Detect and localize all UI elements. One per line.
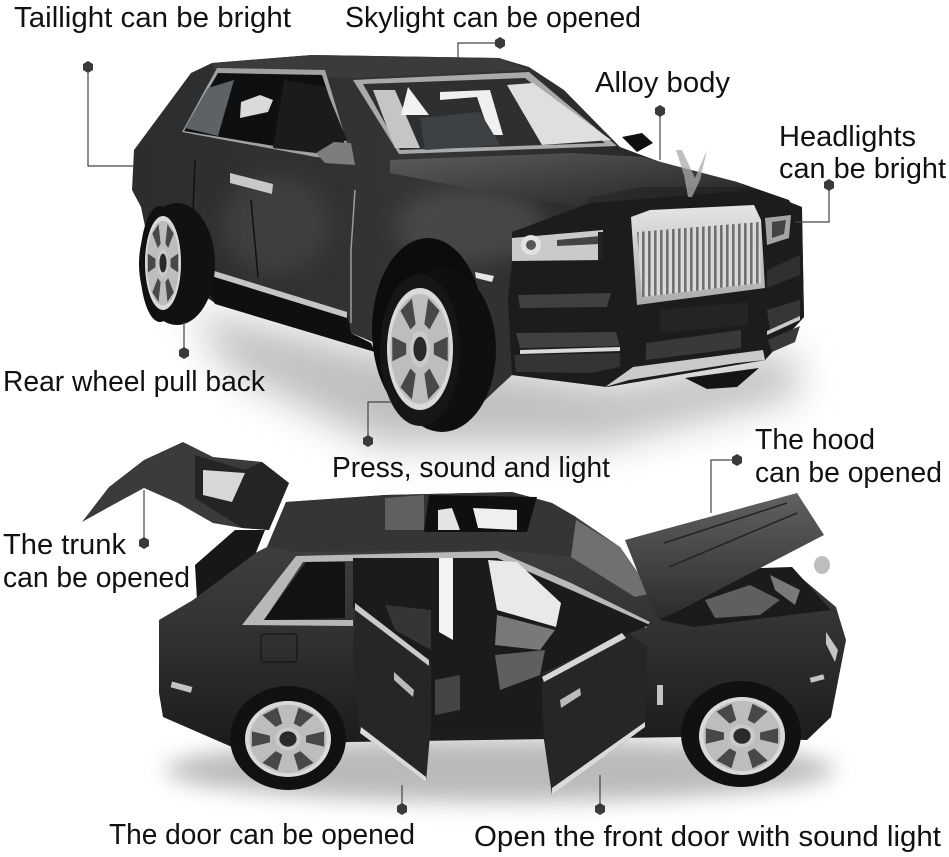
fuel flap — [261, 634, 297, 662]
chrome window surround — [242, 551, 650, 628]
top car: Rolls-Royce Cullinan model, front three-quarter view — [132, 55, 804, 432]
label: trunk: The trunk — [3, 529, 127, 561]
label: trunk — [3, 529, 190, 594]
rear side highlight — [220, 175, 330, 275]
rear opening under tailgate — [195, 530, 265, 600]
side windows — [182, 68, 352, 160]
chrome sill strip — [195, 265, 347, 318]
front wheel — [681, 681, 801, 787]
label: headlights: can be bright — [779, 153, 946, 185]
door seams — [191, 160, 258, 277]
lower bumper vents — [514, 255, 800, 387]
silver hood ornament — [676, 150, 707, 197]
rear wheel — [230, 686, 346, 790]
front wheel arch — [372, 238, 484, 422]
engine bay — [660, 567, 831, 627]
label: trunk: can be opened — [3, 562, 190, 594]
windshield — [571, 520, 652, 597]
label: hood: The hood — [755, 424, 875, 456]
label: skylight: Skylight can be opened — [345, 2, 641, 34]
label: door: The door can be opened — [109, 819, 415, 851]
bottom car: model with doors, trunk and hood open — [82, 442, 846, 795]
front grille — [631, 205, 765, 305]
open rear door — [353, 603, 431, 782]
open hood — [625, 493, 824, 620]
far front wheel — [685, 368, 759, 389]
rear lamp and side markers — [171, 632, 838, 705]
bottom car: ground shadow — [165, 738, 835, 802]
open front door — [542, 633, 647, 795]
label: hood — [755, 424, 942, 489]
headlights — [512, 215, 791, 261]
label: headlights — [779, 121, 946, 185]
front fender highlight — [395, 187, 545, 263]
callout leader lines — [88, 43, 829, 808]
label: rear wheel: Rear wheel pull back — [3, 366, 265, 398]
sunroof panel — [385, 495, 424, 530]
label: press: Press, sound and light — [332, 452, 610, 484]
label: hood: can be opened — [755, 457, 942, 489]
open tailgate — [82, 442, 289, 530]
front fascia — [508, 190, 804, 387]
cabin opening and interior — [353, 558, 650, 733]
roof — [267, 492, 576, 557]
label: front door: Open the front door with sound light — [474, 821, 941, 853]
lower sill — [195, 267, 375, 352]
top car: ground shadow — [190, 310, 800, 445]
sunroof opening — [424, 495, 537, 532]
blurred ornament behind hood — [814, 556, 830, 574]
label: alloy body: Alloy body — [595, 67, 730, 99]
label: headlights: Headlights — [779, 121, 916, 153]
callout dots — [83, 37, 834, 815]
rear wheel — [139, 203, 215, 325]
front wheel — [380, 268, 496, 432]
hood — [390, 153, 746, 207]
windshield — [353, 72, 617, 154]
body side — [132, 55, 804, 405]
rear side window — [264, 562, 345, 620]
roof top edge — [212, 55, 529, 78]
body — [159, 492, 846, 747]
label: taillight: Taillight can be bright — [14, 2, 291, 34]
side mirrors and door handle — [230, 133, 653, 282]
